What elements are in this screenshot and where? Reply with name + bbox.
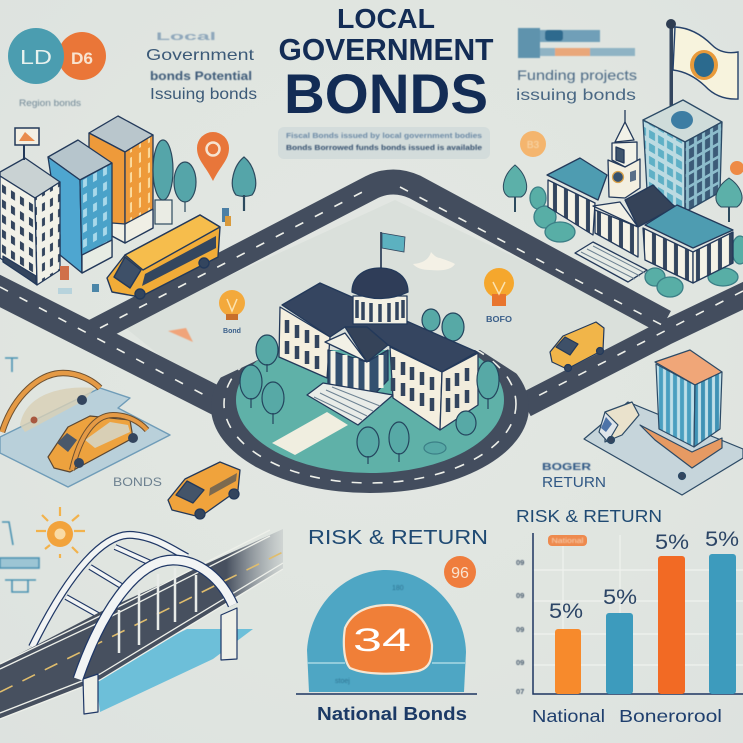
blurred emblem box top right — [518, 28, 635, 58]
blue sketch marks left — [0, 358, 39, 592]
logo: LD and D6 circles: D6 — [71, 49, 93, 68]
roundabout road and lawn — [212, 350, 529, 493]
label: national bonds right chart — [532, 706, 722, 726]
back arch — [32, 535, 187, 647]
gauge value: 34 — [353, 622, 411, 658]
title: BONDS — [284, 62, 488, 125]
right heading: risk and return: RISK & RETURN — [516, 506, 662, 526]
tree and orange badges top right: B3 — [527, 140, 540, 151]
central capitol building — [279, 268, 478, 430]
clock tower — [608, 110, 640, 198]
label: national bonds: National Bonds — [317, 704, 467, 724]
front arch — [78, 560, 233, 679]
sun icon — [36, 507, 85, 558]
lawn trees — [240, 335, 499, 464]
yellow bus — [107, 215, 220, 299]
bar values: 5% — [549, 600, 583, 623]
bars — [555, 554, 736, 694]
logo: LD and D6 circles: LD — [20, 47, 52, 69]
text block: government issuing bonds — [146, 31, 257, 103]
gauge: 180 — [392, 585, 404, 592]
label: national bonds right chart: National — [532, 706, 605, 726]
orange van — [168, 462, 240, 519]
text: return label: RETURN — [542, 474, 606, 491]
badge: 96: 96 — [451, 565, 469, 582]
bar values — [549, 528, 739, 623]
subtitle panel: Bonds Borrowed funds bonds issued is available — [286, 143, 482, 152]
bar values: 5% — [705, 528, 739, 551]
text block: funding projects issuing bonds: issuing bonds — [516, 87, 636, 104]
legend tag: National — [552, 538, 584, 545]
capitol building top right — [530, 110, 743, 297]
y axis labels: 07 — [516, 687, 524, 696]
inner diamond ground — [122, 200, 668, 400]
y axis labels — [516, 558, 524, 696]
text block: funding projects issuing bonds: Funding projects — [517, 67, 637, 83]
label: national bonds right chart: Bonerorool — [619, 706, 722, 726]
building with truck bottom right — [584, 350, 743, 495]
label: bonds: BONDS — [113, 475, 162, 489]
text block: funding projects issuing bonds — [516, 67, 637, 104]
logo: LD and D6 circles: Region bonds — [19, 98, 82, 108]
text block: government issuing bonds: Issuing bonds — [150, 86, 257, 103]
road network — [0, 182, 743, 405]
small orange marker — [168, 328, 193, 342]
right wing front — [390, 347, 442, 430]
gauge: stoej — [335, 678, 350, 685]
gauge — [296, 570, 477, 694]
hanger cables — [119, 568, 196, 653]
y axis labels: 09 — [516, 591, 524, 600]
left heading: risk and return: RISK & RETURN — [308, 527, 488, 549]
light bulb left: Bond — [223, 328, 241, 335]
bar values: 5% — [655, 531, 689, 554]
shrubs — [530, 187, 743, 297]
title — [278, 3, 494, 125]
subtitle panel — [278, 127, 490, 159]
blue building — [48, 140, 112, 273]
billboard sign — [15, 128, 39, 160]
legend tag — [548, 535, 587, 546]
bar chart — [516, 528, 743, 696]
city buildings top left — [0, 116, 153, 285]
tree and orange badges top right — [503, 131, 743, 222]
grid — [532, 535, 743, 693]
y axis labels: 09 — [516, 658, 524, 667]
logo: LD and D6 circles — [8, 28, 106, 108]
bar values: 5% — [603, 586, 637, 609]
title: LOCAL — [337, 3, 435, 34]
location pin — [197, 132, 229, 181]
central capitol flag and cloud — [381, 232, 455, 270]
stairs — [307, 383, 393, 425]
tower behind top-right capitol — [643, 100, 722, 212]
light bulb right: BOFO — [486, 315, 512, 324]
text: return label: BOGER — [542, 462, 592, 473]
orange building — [89, 116, 153, 243]
people and scooter near bus — [58, 266, 99, 294]
text: return label — [542, 462, 606, 491]
subtitle panel: Fiscal Bonds issued by local government bodies — [286, 131, 482, 140]
right wing end — [440, 353, 478, 430]
pillars — [83, 674, 98, 714]
axes — [533, 533, 743, 694]
y axis labels: 09 — [516, 625, 524, 634]
water — [95, 629, 253, 712]
title: GOVERNMENT — [278, 32, 494, 67]
left wing — [279, 307, 330, 378]
trees top left — [153, 140, 256, 224]
text block: government issuing bonds: Local — [156, 31, 216, 43]
white building — [0, 158, 60, 285]
car under arch — [48, 416, 133, 472]
small person — [222, 208, 231, 226]
trees behind central capitol — [422, 309, 464, 341]
road deck — [0, 529, 283, 719]
large arch bridge — [0, 529, 283, 719]
flag on tower — [666, 19, 738, 106]
text block: government issuing bonds: bonds Potential — [150, 69, 252, 83]
portico — [345, 327, 388, 362]
light bulb left — [219, 290, 245, 335]
light bulb right — [484, 268, 514, 324]
y axis labels: 09 — [516, 558, 524, 567]
bridges and cars on plates left — [0, 373, 170, 487]
dark roof — [282, 283, 477, 372]
badge: 96 — [444, 556, 476, 588]
text block: government issuing bonds: Government — [146, 47, 255, 64]
dome — [352, 268, 408, 324]
yellow car centre right — [550, 322, 604, 372]
